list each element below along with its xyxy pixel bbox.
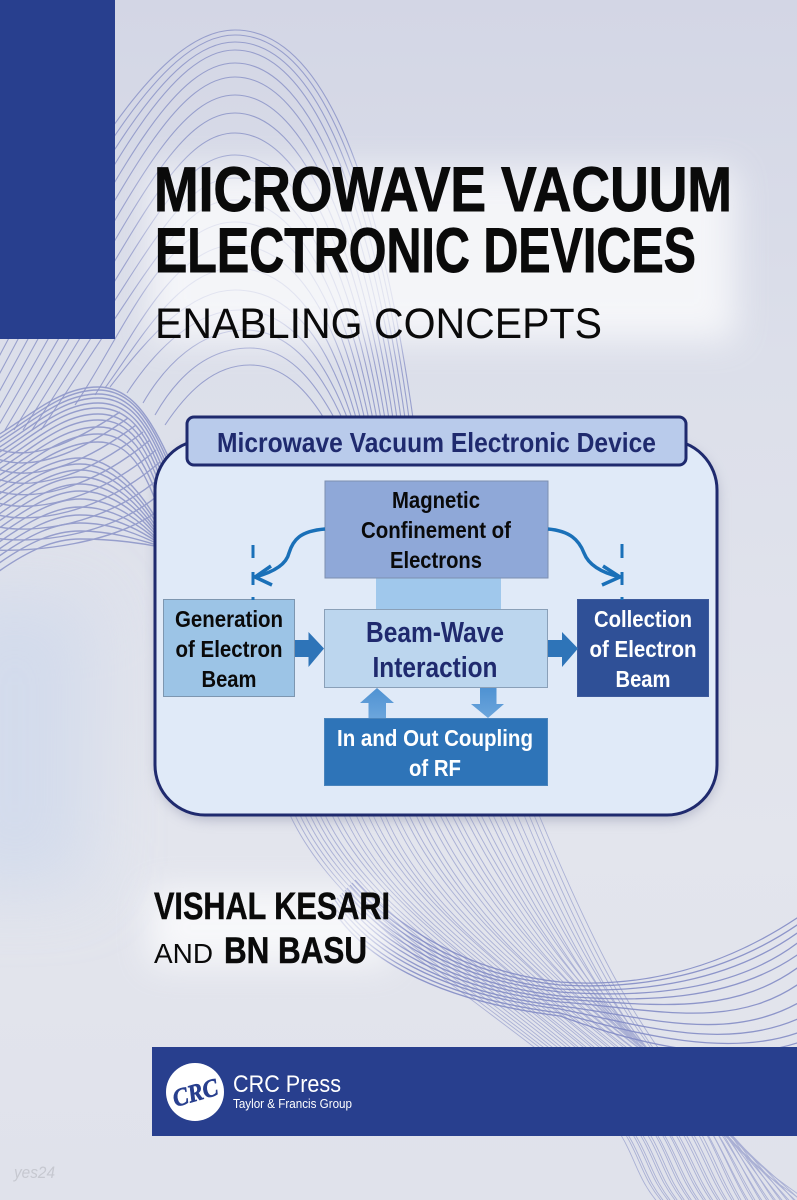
box: collection of electron beam — [578, 600, 708, 696]
top-left blue block — [0, 0, 115, 339]
wave pattern: descending ribbon — [290, 815, 797, 1200]
box: generation of electron beam: Beam — [202, 666, 256, 692]
authors — [154, 886, 390, 971]
connector column — [376, 578, 501, 609]
box: collection of electron beam: Collection — [594, 606, 692, 632]
panel heading — [187, 417, 686, 465]
box: generation of electron beam: of Electron — [176, 636, 282, 662]
box: magnetic confinement: Electrons — [390, 547, 482, 573]
box: beam-wave interaction: Beam-Wave — [366, 617, 504, 649]
box: in and out coupling of RF: of RF — [409, 755, 461, 781]
wave pattern: globe — [0, 387, 172, 574]
arrow: generation to interaction — [295, 632, 324, 667]
box: in and out coupling of RF — [324, 718, 548, 786]
title — [154, 155, 732, 286]
authors: AND — [154, 938, 213, 969]
box: beam-wave interaction: Interaction — [372, 652, 498, 684]
text glow — [150, 170, 735, 965]
box: generation of electron beam — [164, 600, 294, 696]
authors: BN BASU — [224, 930, 367, 971]
wave pattern: dome arcs — [0, 30, 414, 430]
box: magnetic confinement: Confinement of — [361, 517, 511, 543]
arrow: coupling up — [360, 688, 394, 718]
box: beam-wave interaction — [324, 610, 548, 688]
logo: CRC — [166, 1063, 224, 1121]
wave pattern: crossing wave — [330, 880, 797, 1052]
box: in and out coupling of RF: In and Out Coupling — [337, 725, 533, 751]
publisher name: Taylor & Francis Group — [233, 1097, 352, 1111]
logo: CRC: CRC — [170, 1074, 222, 1113]
box: magnetic confinement — [325, 481, 548, 578]
arrow: magnetic field to electron gun — [255, 529, 325, 585]
arrow: magnetic field to collector — [548, 529, 620, 585]
subtitle: ENABLING CONCEPTS — [155, 300, 602, 348]
box: collection of electron beam: of Electron — [590, 636, 696, 662]
panel heading: Microwave Vacuum Electronic Device — [217, 427, 656, 458]
box: magnetic confinement: Magnetic — [392, 487, 480, 513]
authors: VISHAL KESARI — [154, 886, 390, 928]
publisher name: CRC Press — [233, 1071, 341, 1098]
publisher bar — [152, 1047, 797, 1136]
publisher name — [233, 1071, 352, 1111]
diagram panel — [155, 417, 717, 815]
arrow: interaction to collection — [548, 632, 578, 667]
panel shadow — [156, 444, 718, 820]
axis marks — [253, 544, 622, 600]
box: collection of electron beam: Beam — [616, 666, 670, 692]
box: generation of electron beam: Generation — [175, 606, 283, 632]
arrow: coupling down — [471, 688, 504, 718]
watermark: yes24 — [13, 1163, 55, 1182]
